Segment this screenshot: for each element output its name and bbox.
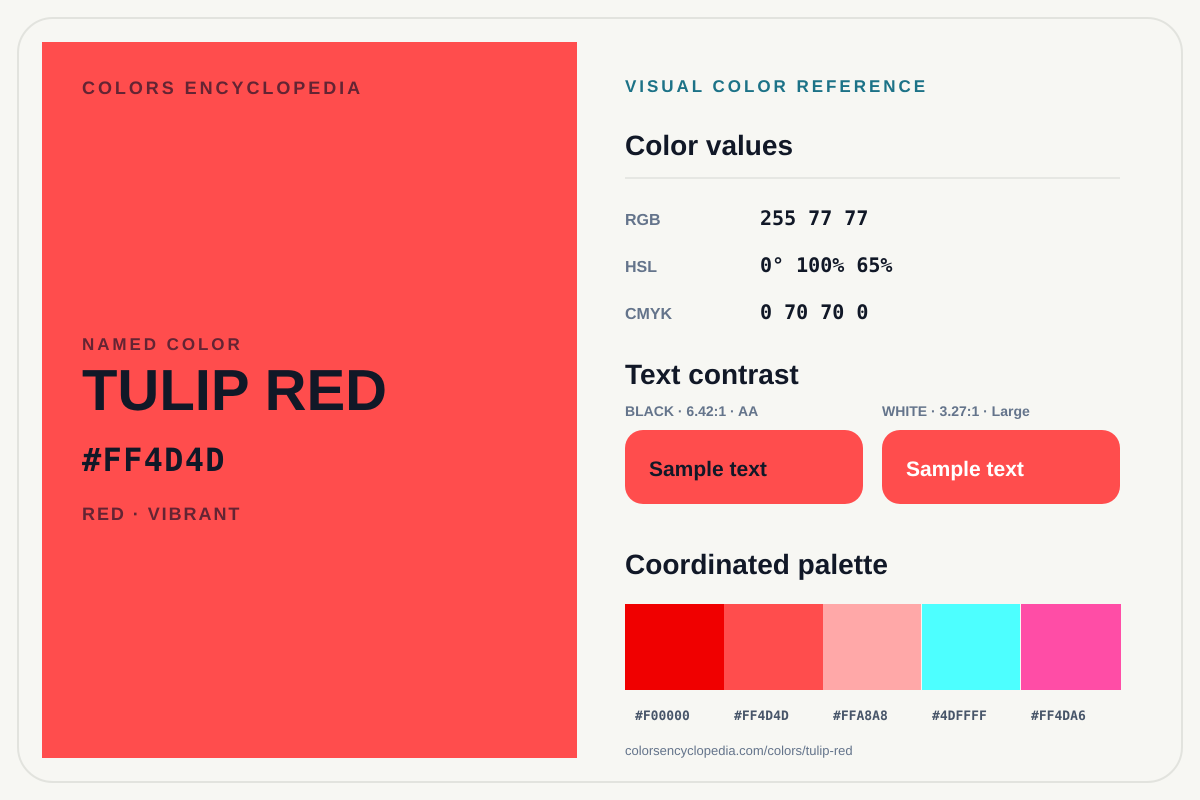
hex FF4DA6: #FF4DA6 bbox=[1031, 709, 1086, 724]
family and mood: RED · VIBRANT bbox=[82, 504, 241, 524]
sample text white: Sample text bbox=[906, 458, 1024, 481]
swatch 4DFFFF bbox=[922, 604, 1020, 690]
heading: coordinated palette: Coordinated palette bbox=[625, 549, 888, 580]
HSL label: HSL bbox=[625, 259, 657, 276]
named color label: NAMED COLOR bbox=[82, 335, 243, 354]
white text sample bbox=[882, 430, 1120, 504]
black text sample bbox=[625, 430, 863, 504]
hex FF4D4D: #FF4D4D bbox=[734, 709, 789, 724]
swatch FF4DA6 bbox=[1021, 604, 1121, 690]
black contrast label: BLACK · 6.42:1 · AA bbox=[625, 403, 758, 419]
heading: text contrast: Text contrast bbox=[625, 359, 799, 390]
swatch FFA8A8 bbox=[823, 604, 921, 690]
heading: color values: Color values bbox=[625, 130, 793, 161]
CMYK value: 0 70 70 0 bbox=[760, 300, 868, 324]
divider bbox=[625, 177, 1120, 179]
palette hex labels bbox=[635, 709, 1086, 724]
color name: TULIP RED bbox=[82, 358, 387, 423]
CMYK label: CMYK bbox=[625, 306, 672, 323]
RGB value: 255 77 77 bbox=[760, 206, 868, 230]
hex 4DFFFF: #4DFFFF bbox=[932, 709, 987, 724]
RGB label: RGB bbox=[625, 212, 661, 229]
hex FFA8A8: #FFA8A8 bbox=[833, 709, 888, 724]
color values table bbox=[625, 206, 892, 324]
sample text black: Sample text bbox=[649, 458, 767, 481]
panel: color swatch bbox=[42, 42, 577, 758]
eyebrow heading: VISUAL COLOR REFERENCE bbox=[625, 77, 928, 96]
white contrast label: WHITE · 3.27:1 · Large bbox=[882, 403, 1030, 419]
source url: colorsencyclopedia.com/colors/tulip-red bbox=[625, 743, 853, 758]
hex F00000: #F00000 bbox=[635, 709, 690, 724]
swatch FF4D4D bbox=[724, 604, 823, 690]
swatch F00000 bbox=[625, 604, 724, 690]
palette swatches bbox=[625, 604, 1121, 690]
HSL value: 0° 100% 65% bbox=[760, 253, 892, 277]
brand label: COLORS ENCYCLOPEDIA bbox=[82, 78, 363, 98]
hex value: #FF4D4D bbox=[82, 441, 226, 479]
